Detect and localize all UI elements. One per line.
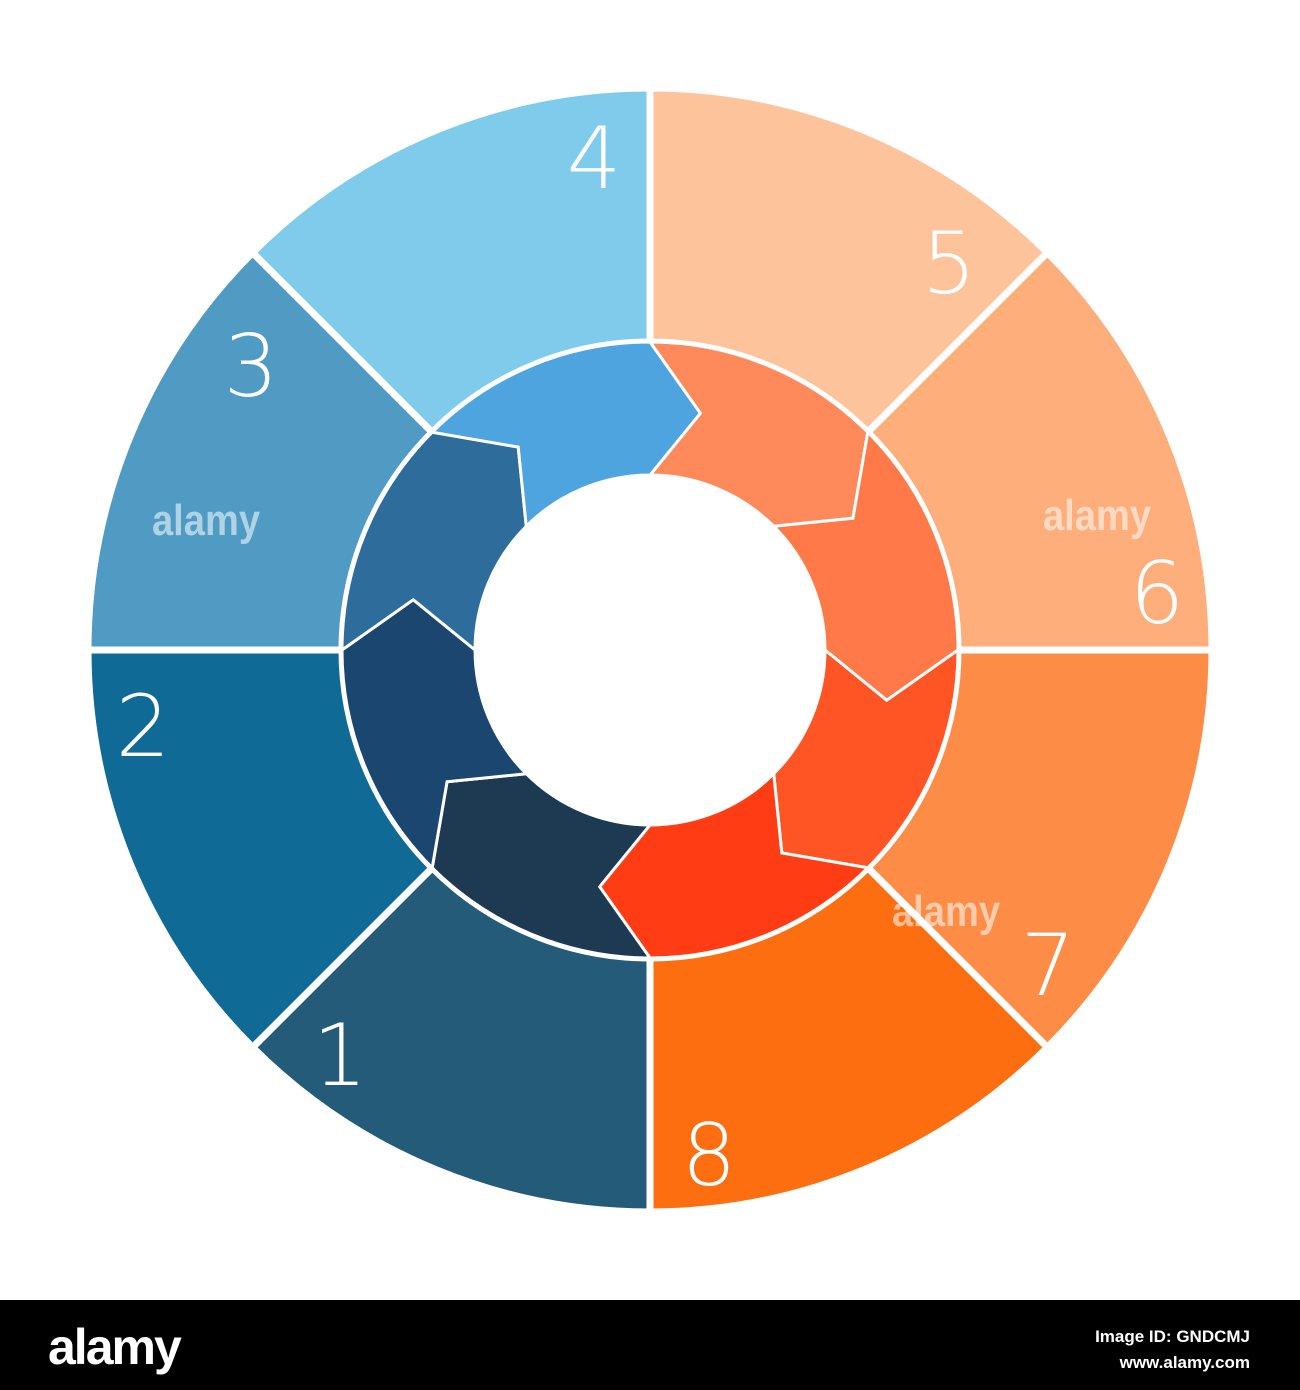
segment 5 xyxy=(650,88,1047,650)
segment numbers: 8 xyxy=(682,1106,736,1206)
segment numbers: 1 xyxy=(313,1006,367,1106)
segment numbers: 5 xyxy=(922,214,976,314)
center white circle xyxy=(475,475,825,825)
segment 4 xyxy=(253,88,650,650)
inner ring of arrows xyxy=(278,278,1022,1022)
watermarks: alamy xyxy=(1043,491,1151,540)
segment numbers: 3 xyxy=(224,317,278,417)
arrow 315-360 xyxy=(432,278,717,563)
segment numbers xyxy=(116,109,1184,1206)
arrow 135-180 xyxy=(583,737,868,1022)
segment 6 xyxy=(650,253,1212,650)
watermarks: alamy xyxy=(892,887,1000,936)
arrow 45-90 xyxy=(737,432,1022,717)
watermarks xyxy=(152,491,1151,936)
segment numbers: 6 xyxy=(1130,544,1184,644)
segment 7 xyxy=(650,650,1212,1047)
arrow 225-270 xyxy=(278,583,563,868)
image id: Image ID: GNDCMJ xyxy=(1095,1327,1250,1346)
watermarks: alamy xyxy=(152,496,260,545)
segment numbers: 4 xyxy=(567,109,621,209)
segment numbers: 2 xyxy=(116,677,170,777)
bottom bar xyxy=(0,1300,1300,1390)
arrow 0-45 xyxy=(650,342,868,526)
segment 1 xyxy=(253,650,650,1212)
segment numbers: 7 xyxy=(1021,916,1075,1016)
arrow 90-135 xyxy=(774,650,958,868)
image id: www.alamy.com xyxy=(1120,1353,1250,1372)
logo: alamy xyxy=(48,1319,180,1375)
image id xyxy=(1095,1327,1250,1372)
arrow 270-315 xyxy=(342,432,526,650)
arrow 180-225 xyxy=(432,774,650,958)
outer segments xyxy=(88,88,1212,1212)
segment 2 xyxy=(88,650,650,1047)
segment 3 xyxy=(88,253,650,650)
segment 8 xyxy=(650,650,1047,1212)
